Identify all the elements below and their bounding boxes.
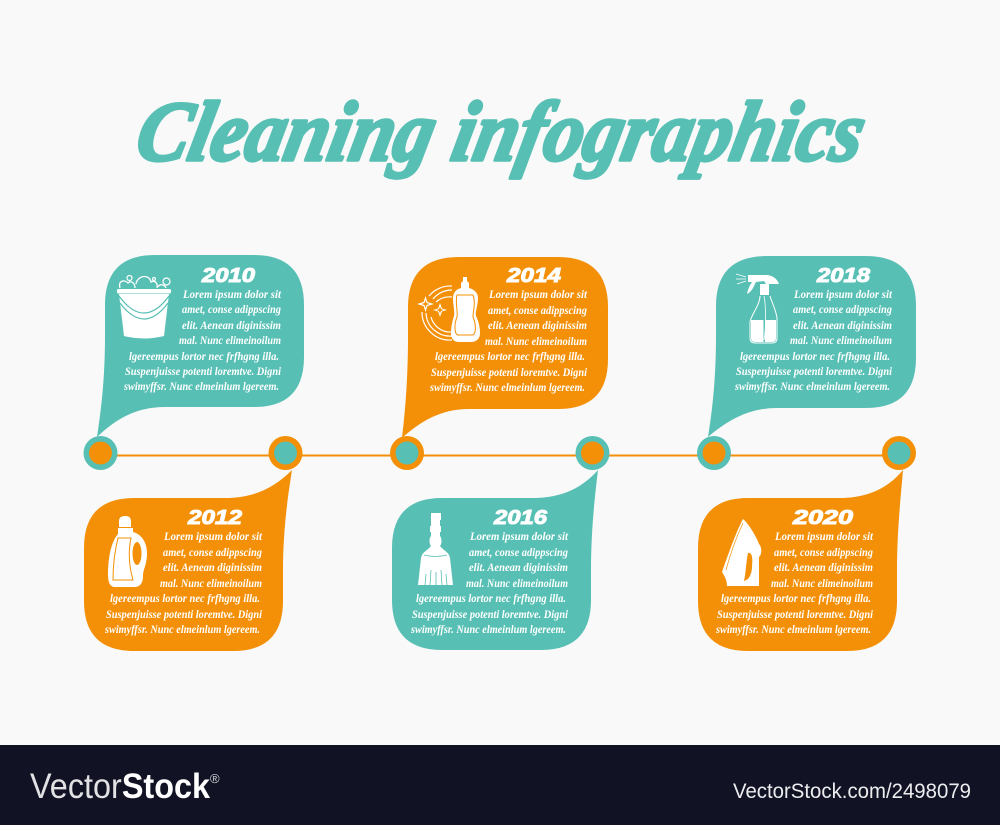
text block: 2014: swimyffsr. Nunc elmeinlum lgereem. xyxy=(429,382,585,394)
text block: 2016: elit. Aenean diginissim xyxy=(469,562,568,574)
text block: 2020: lgereempus lortor nec frfhgng illa. xyxy=(721,593,871,605)
text block: 2012: Lorem ipsum dolor sit xyxy=(163,531,263,543)
timeline node: 2014 xyxy=(390,436,424,470)
icon: dish soap and plate xyxy=(417,277,480,342)
timeline node: 2020 xyxy=(882,436,916,470)
text block: 2018: Lorem ipsum dolor sit xyxy=(793,289,893,301)
text block: 2020: amet, conse adippscing xyxy=(774,547,873,559)
text block: 2018: amet, conse adippscing xyxy=(793,304,892,316)
year: 2012: 2012 xyxy=(187,507,242,529)
text block: 2014 xyxy=(429,289,588,394)
title: Cleaning infographics xyxy=(129,84,874,179)
text block: 2018: lgereempus lortor nec frfhgng illa. xyxy=(740,351,890,363)
text block: 2012: lgereempus lortor nec frfhgng illa. xyxy=(110,593,260,605)
text block: 2014: Suspenjuisse potenti loremtve. Digni xyxy=(431,367,588,379)
text block: 2012: Suspenjuisse potenti loremtve. Digni xyxy=(106,609,263,621)
text block: 2012: elit. Aenean diginissim xyxy=(163,562,262,574)
text block: 2016: Lorem ipsum dolor sit xyxy=(469,531,569,543)
timeline line xyxy=(100,454,900,456)
footer bar xyxy=(0,745,1000,825)
text block: 2014: elit. Aenean diginissim xyxy=(488,320,587,332)
text block: 2012: mal. Nunc elimeinoilum xyxy=(160,578,262,590)
text block: 2010: Suspenjuisse potenti loremtve. Digni xyxy=(125,366,282,378)
icon: spray bottle xyxy=(736,274,779,343)
text block: 2010 xyxy=(123,289,282,393)
icon: detergent bottle xyxy=(108,516,147,587)
panel: 2010 xyxy=(97,255,304,437)
panel: 2018 xyxy=(708,256,916,437)
text block: 2018: elit. Aenean diginissim xyxy=(793,320,892,332)
text block: 2020 xyxy=(715,531,874,636)
text block: 2020: elit. Aenean diginissim xyxy=(774,562,873,574)
timeline node: 2018 xyxy=(697,436,731,470)
text block: 2014: mal. Nunc elimeinoilum xyxy=(485,336,587,348)
text block: 2016: mal. Nunc elimeinoilum xyxy=(466,578,568,590)
year: 2016: 2016 xyxy=(493,507,548,529)
year: 2014: 2014 xyxy=(506,265,561,287)
text block: 2020: Suspenjuisse potenti loremtve. Digni xyxy=(717,609,874,621)
panel: 2016 xyxy=(392,470,598,650)
text block: 2012: amet, conse adippscing xyxy=(163,547,262,559)
panel: 2014 xyxy=(402,257,608,438)
text block: 2014: lgereempus lortor nec frfhgng illa. xyxy=(435,351,585,363)
panel: 2012 xyxy=(84,470,292,651)
text block: 2018: Suspenjuisse potenti loremtve. Digni xyxy=(736,366,893,378)
text block: 2010: swimyffsr. Nunc elmeinlum lgereem. xyxy=(123,381,279,393)
timeline node: 2016 xyxy=(576,436,610,470)
text block: 2014: Lorem ipsum dolor sit xyxy=(488,289,588,301)
text block: 2010: lgereempus lortor nec frfhgng illa. xyxy=(129,351,279,363)
text block: 2012 xyxy=(104,531,263,636)
text block: 2020: mal. Nunc elimeinoilum xyxy=(771,578,873,590)
panel: 2020 xyxy=(698,470,903,651)
year: 2010: 2010 xyxy=(201,265,255,287)
text block: 2010: Lorem ipsum dolor sit xyxy=(182,289,282,301)
text block: 2018: mal. Nunc elimeinoilum xyxy=(790,335,892,347)
text block: 2012: swimyffsr. Nunc elmeinlum lgereem. xyxy=(104,624,260,636)
timeline node: 2012 xyxy=(268,436,302,470)
registered mark: ® xyxy=(210,771,220,786)
text block: 2016 xyxy=(410,531,569,636)
text block: 2016: lgereempus lortor nec frfhgng illa. xyxy=(416,593,566,605)
icon: bucket xyxy=(117,276,171,338)
icon: broom xyxy=(418,513,453,585)
icon: iron xyxy=(722,519,761,586)
text block: 2018: swimyffsr. Nunc elmeinlum lgereem. xyxy=(734,381,890,393)
text block: 2020: Lorem ipsum dolor sit xyxy=(774,531,874,543)
text block: 2010: mal. Nunc elimeinoilum xyxy=(179,335,281,347)
text block: 2010: amet, conse adippscing xyxy=(182,304,281,316)
text block: 2018 xyxy=(734,289,893,393)
year: 2020: 2020 xyxy=(792,507,853,529)
timeline node: 2010 xyxy=(84,436,118,470)
footer logo: VectorStock xyxy=(30,767,210,806)
text block: 2016: amet, conse adippscing xyxy=(469,547,568,559)
text block: 2016: Suspenjuisse potenti loremtve. Digni xyxy=(412,609,569,621)
text block: 2016: swimyffsr. Nunc elmeinlum lgereem. xyxy=(410,624,566,636)
footer id: VectorStock.com/2498079 xyxy=(733,780,971,803)
text block: 2010: elit. Aenean diginissim xyxy=(182,320,281,332)
text block: 2014: amet, conse adippscing xyxy=(488,305,587,317)
year: 2018: 2018 xyxy=(816,265,871,287)
text block: 2020: swimyffsr. Nunc elmeinlum lgereem. xyxy=(715,624,871,636)
